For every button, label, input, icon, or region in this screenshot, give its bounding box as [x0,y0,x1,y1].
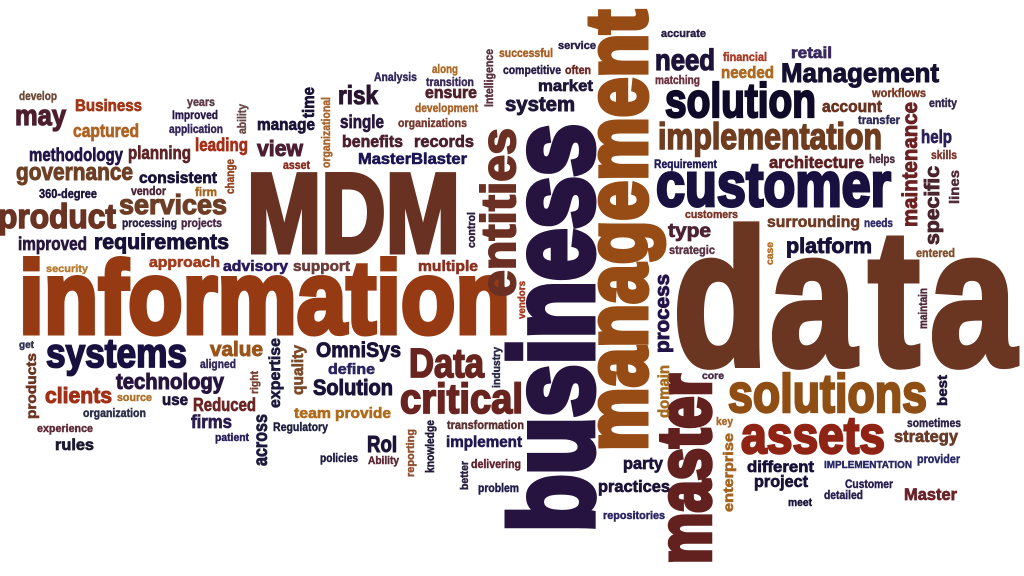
word: surrounding: surrounding [767,214,860,231]
word: meet: meet [788,497,812,509]
word: source: source [117,392,152,404]
word: matching: matching [655,73,700,87]
word: transfer: transfer [858,113,900,127]
word: consistent: consistent [139,170,218,187]
word: party: party [623,454,664,473]
word: workflows: workflows [871,86,926,100]
word: strategic: strategic [669,243,715,257]
word: transition: transition [426,75,474,89]
word: retail: retail [791,45,832,62]
word: single: single [340,112,384,132]
word: vendor: vendor [131,184,166,198]
word: information: information [19,240,510,355]
word: years: years [187,95,215,109]
word: customer: customer [656,151,891,220]
word: IMPLEMENTATION: IMPLEMENTATION [824,459,912,471]
word: market: market [538,78,594,95]
word: industry: industry [491,346,503,388]
word: OmniSys: OmniSys [316,339,401,362]
word: solution: solution [665,75,816,128]
word: financial: financial [723,50,767,64]
word: approach: approach [149,255,220,271]
word: repositories: repositories [603,510,665,522]
word: 360-degree: 360-degree [39,187,97,201]
word: systems: systems [46,330,187,376]
word: enterprise: enterprise [720,433,736,512]
word: leading: leading [195,135,248,155]
word: assets: assets [741,407,885,465]
word: entered: entered [916,246,955,260]
word: products: products [23,353,39,419]
word: case: case [765,242,776,265]
word: delivering: delivering [471,457,521,471]
word: change: change [223,159,237,194]
word: provider: provider [917,452,960,466]
word: process: process [652,274,674,353]
word: clients: clients [45,383,112,408]
word: often: often [565,63,591,77]
word: development: development [415,101,478,115]
word: MDM: MDM [247,151,460,276]
word: control: control [466,212,478,248]
word: security: security [46,263,88,275]
word: team: team [294,405,331,422]
word: governance: governance [16,159,133,186]
word: MasterBlaster: MasterBlaster [358,151,467,168]
word: product: product [0,198,116,236]
word: help: help [921,127,952,147]
word: develop: develop [19,89,57,103]
word: may: may [15,100,66,132]
word: critical: critical [400,375,523,422]
word: vendors: vendors [517,281,528,319]
word: maintain: maintain [916,288,930,329]
word: Business: Business [75,96,142,115]
word: policies: policies [320,453,358,465]
word: sometimes: sometimes [907,416,961,430]
word: type: type [668,221,711,242]
word: implement: implement [446,434,522,451]
word: accurate: accurate [661,28,706,40]
word: Improved: Improved [172,108,218,122]
word: strategy: strategy [894,427,959,446]
word: Data: Data [409,340,485,386]
word: right: right [249,371,261,394]
word: support: support [293,259,350,275]
word: methodology: methodology [29,145,123,165]
word: service: service [558,40,596,52]
word: multiple: multiple [418,259,478,275]
word: entity: entity [929,96,957,110]
word: processing: processing [122,218,177,230]
word: Master: Master [904,485,957,504]
word: knowledge: knowledge [425,420,437,473]
word: different: different [747,459,815,476]
word: maintenance: maintenance [899,102,922,227]
word: entities: entities [473,128,526,297]
word: requirements: requirements [94,231,229,254]
word: define: define [328,361,375,378]
word: project: project [754,472,808,491]
word: Management: Management [781,58,939,88]
word: implementation: implementation [658,116,882,157]
word: detailed: detailed [824,488,863,502]
word: organizations: organizations [398,116,467,130]
word: Customer: Customer [845,477,893,491]
word: account: account [822,97,882,116]
word: RoI: RoI [367,431,397,457]
word: core: core [702,370,724,382]
word: needs: needs [864,216,893,230]
word: Ability: Ability [368,455,400,467]
word: get: get [19,340,35,351]
word: successful: successful [499,46,553,60]
word: ensure: ensure [425,83,477,102]
word: view: view [257,136,304,161]
word: problem: problem [478,483,519,495]
word: needed: needed [721,63,774,82]
word: need: need [655,44,715,77]
word: manage: manage [257,115,315,134]
word: firm: firm [195,185,217,199]
word: better: better [459,460,471,490]
word: competitive: competitive [503,63,561,77]
word: best: best [934,375,950,406]
word: improved: improved [18,234,87,254]
word: Regulatory: Regulatory [273,420,328,434]
word: practices: practices [598,477,670,496]
word: across: across [251,414,272,466]
word: solutions: solutions [728,364,927,424]
word: Solution: Solution [313,375,393,400]
word: data: data [673,191,1017,407]
word: Reduced: Reduced [193,395,256,415]
word: reporting: reporting [405,429,417,477]
word: benefits: benefits [342,132,403,151]
word: services: services [119,189,227,220]
word: value: value [210,339,263,361]
word: master: master [643,374,726,564]
word: advisory: advisory [223,259,288,275]
word: asset: asset [283,158,310,172]
word: quality: quality [290,345,307,395]
word: architecture: architecture [769,153,864,172]
word: planning: planning [128,143,191,163]
word: rules: rules [55,437,94,454]
word: application: application [169,122,223,136]
word: Intelligence: Intelligence [482,49,496,107]
word: risk: risk [338,80,378,110]
word: lines: lines [946,170,962,204]
word: use: use [162,392,188,409]
word: platform: platform [786,235,872,258]
word: helps: helps [869,152,895,166]
word: transformation: transformation [447,418,524,432]
word: expertise: expertise [267,338,284,408]
word: domain: domain [656,365,673,418]
word: along: along [432,62,458,76]
word: business: business [487,124,617,532]
word: system: system [505,94,575,116]
word: captured: captured [73,121,139,141]
word: patient: patient [215,432,249,444]
word: projects: projects [181,218,222,230]
word: firms: firms [191,412,232,432]
word: time: time [299,87,318,118]
word: records: records [414,132,474,151]
word: experience: experience [37,423,93,435]
word: Analysis: Analysis [374,70,417,84]
word: skills: skills [931,148,957,162]
word: specific: specific [922,166,944,245]
word: provide: provide [335,405,391,422]
word: organizational: organizational [319,97,333,168]
word: key: key [716,416,734,428]
word: aligned: aligned [200,359,236,371]
word: Requirement: Requirement [654,157,717,171]
word: customers: customers [685,209,738,221]
word: organization: organization [83,408,146,420]
word: technology: technology [116,369,225,394]
word: ability: ability [235,104,249,134]
